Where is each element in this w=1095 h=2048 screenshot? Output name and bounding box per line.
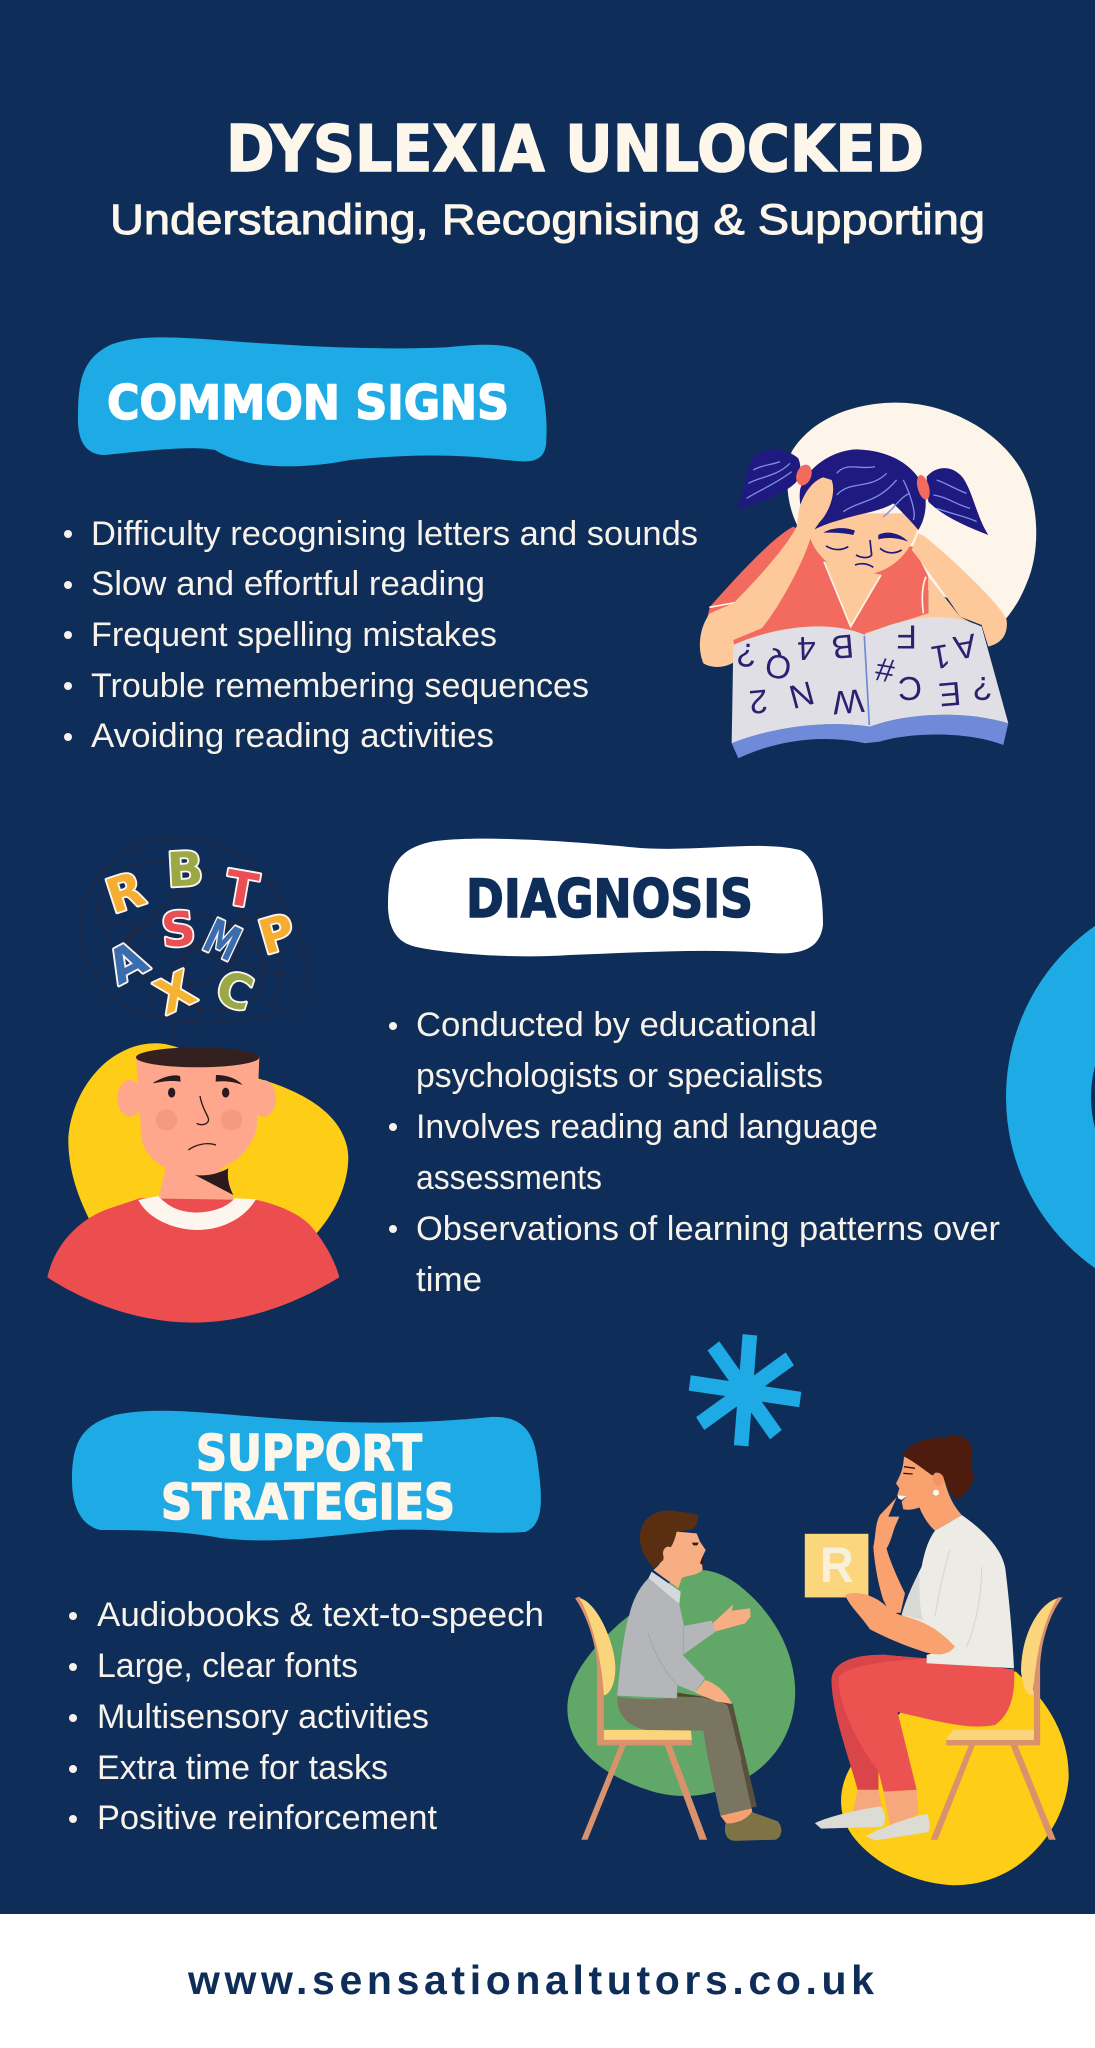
illustration: girl reading a book: 2 — [747, 682, 769, 720]
list: diagnosis: Involves reading and language — [416, 1108, 878, 1146]
list: common signs: Avoiding reading activities — [91, 717, 494, 755]
illustration: girl reading a book: ? — [736, 635, 758, 673]
illustration: confused boy with scrambled letters — [47, 838, 348, 1323]
illustration: teacher and child speech session: R — [820, 1538, 854, 1593]
illustration: confused boy with scrambled letters: R — [100, 862, 151, 925]
list: support strategies: Extra time for tasks — [97, 1749, 388, 1787]
list: diagnosis: time — [416, 1261, 482, 1299]
list: support strategies: Audiobooks & text-to-speech — [97, 1596, 544, 1634]
illustration: confused boy with scrambled letters: T — [221, 860, 263, 920]
illustration: girl reading a book: 4 — [797, 629, 817, 666]
list: diagnosis: psychologists or specialists — [416, 1057, 823, 1095]
list: diagnosis: assessments — [416, 1159, 602, 1197]
list: diagnosis: Observations of learning patterns over — [416, 1210, 1000, 1248]
illustration: girl reading a book: Q — [762, 645, 794, 686]
list: common signs: Difficulty recognising letters and sounds — [91, 515, 698, 553]
illustration: confused boy with scrambled letters: X — [148, 961, 204, 1026]
subtitle: Understanding, Recognising & Supporting — [110, 196, 985, 244]
list: diagnosis: Conducted by educational — [416, 1006, 817, 1044]
illustration: confused boy with scrambled letters: A — [98, 930, 157, 996]
illustration: confused boy with scrambled letters: S — [159, 901, 198, 959]
illustration: girl reading a book — [700, 403, 1036, 758]
illustration: confused boy with scrambled letters: B — [166, 842, 205, 899]
illustration: girl reading a book: W — [830, 681, 866, 721]
illustration: teacher and child speech session — [567, 1435, 1069, 1885]
list: common signs — [64, 515, 698, 755]
illustration: girl reading a book: A — [950, 626, 979, 666]
list: common signs: Frequent spelling mistakes — [91, 616, 497, 654]
heading: common signs — [78, 337, 547, 466]
illustration: girl reading a book: # — [872, 649, 897, 689]
illustration: girl reading a book: N — [785, 673, 818, 715]
heading: support strategies — [72, 1411, 541, 1540]
illustration: girl reading a book: E — [937, 674, 963, 713]
decorative blue ring — [1048, 930, 1095, 1264]
illustration: girl reading a book: 1 — [928, 636, 953, 676]
title: DYSLEXIA UNLOCKED — [226, 113, 924, 187]
heading: diagnosis — [388, 839, 823, 956]
illustration: girl reading a book: F — [896, 617, 917, 654]
list: diagnosis — [389, 1006, 1000, 1299]
list: support strategies — [69, 1596, 544, 1837]
list: support strategies: Multisensory activities — [97, 1698, 429, 1736]
list: common signs: Trouble remembering sequences — [91, 667, 589, 705]
heading: support strategies: SUPPORT — [196, 1425, 423, 1482]
illustration: girl reading a book: C — [898, 669, 922, 706]
footer website: www.sensationaltutors.co.uk — [187, 1957, 874, 2003]
heading: common signs: COMMON SIGNS — [107, 376, 509, 431]
illustration: confused boy with scrambled letters: P — [253, 904, 301, 966]
list: support strategies: Positive reinforcement — [97, 1799, 438, 1837]
footer band — [0, 1914, 1095, 2048]
heading: support strategies: STRATEGIES — [161, 1474, 455, 1531]
illustration: confused boy with scrambled letters: M — [195, 909, 249, 973]
heading: diagnosis: DIAGNOSIS — [466, 869, 753, 930]
illustration: girl reading a book: B — [830, 626, 855, 665]
list: support strategies: Large, clear fonts — [97, 1647, 358, 1685]
illustration: confused boy with scrambled letters: C — [209, 960, 259, 1023]
icon: blue asterisk — [690, 1335, 800, 1446]
illustration: girl reading a book: ? — [973, 669, 992, 706]
list: common signs: Slow and effortful reading — [91, 565, 485, 603]
